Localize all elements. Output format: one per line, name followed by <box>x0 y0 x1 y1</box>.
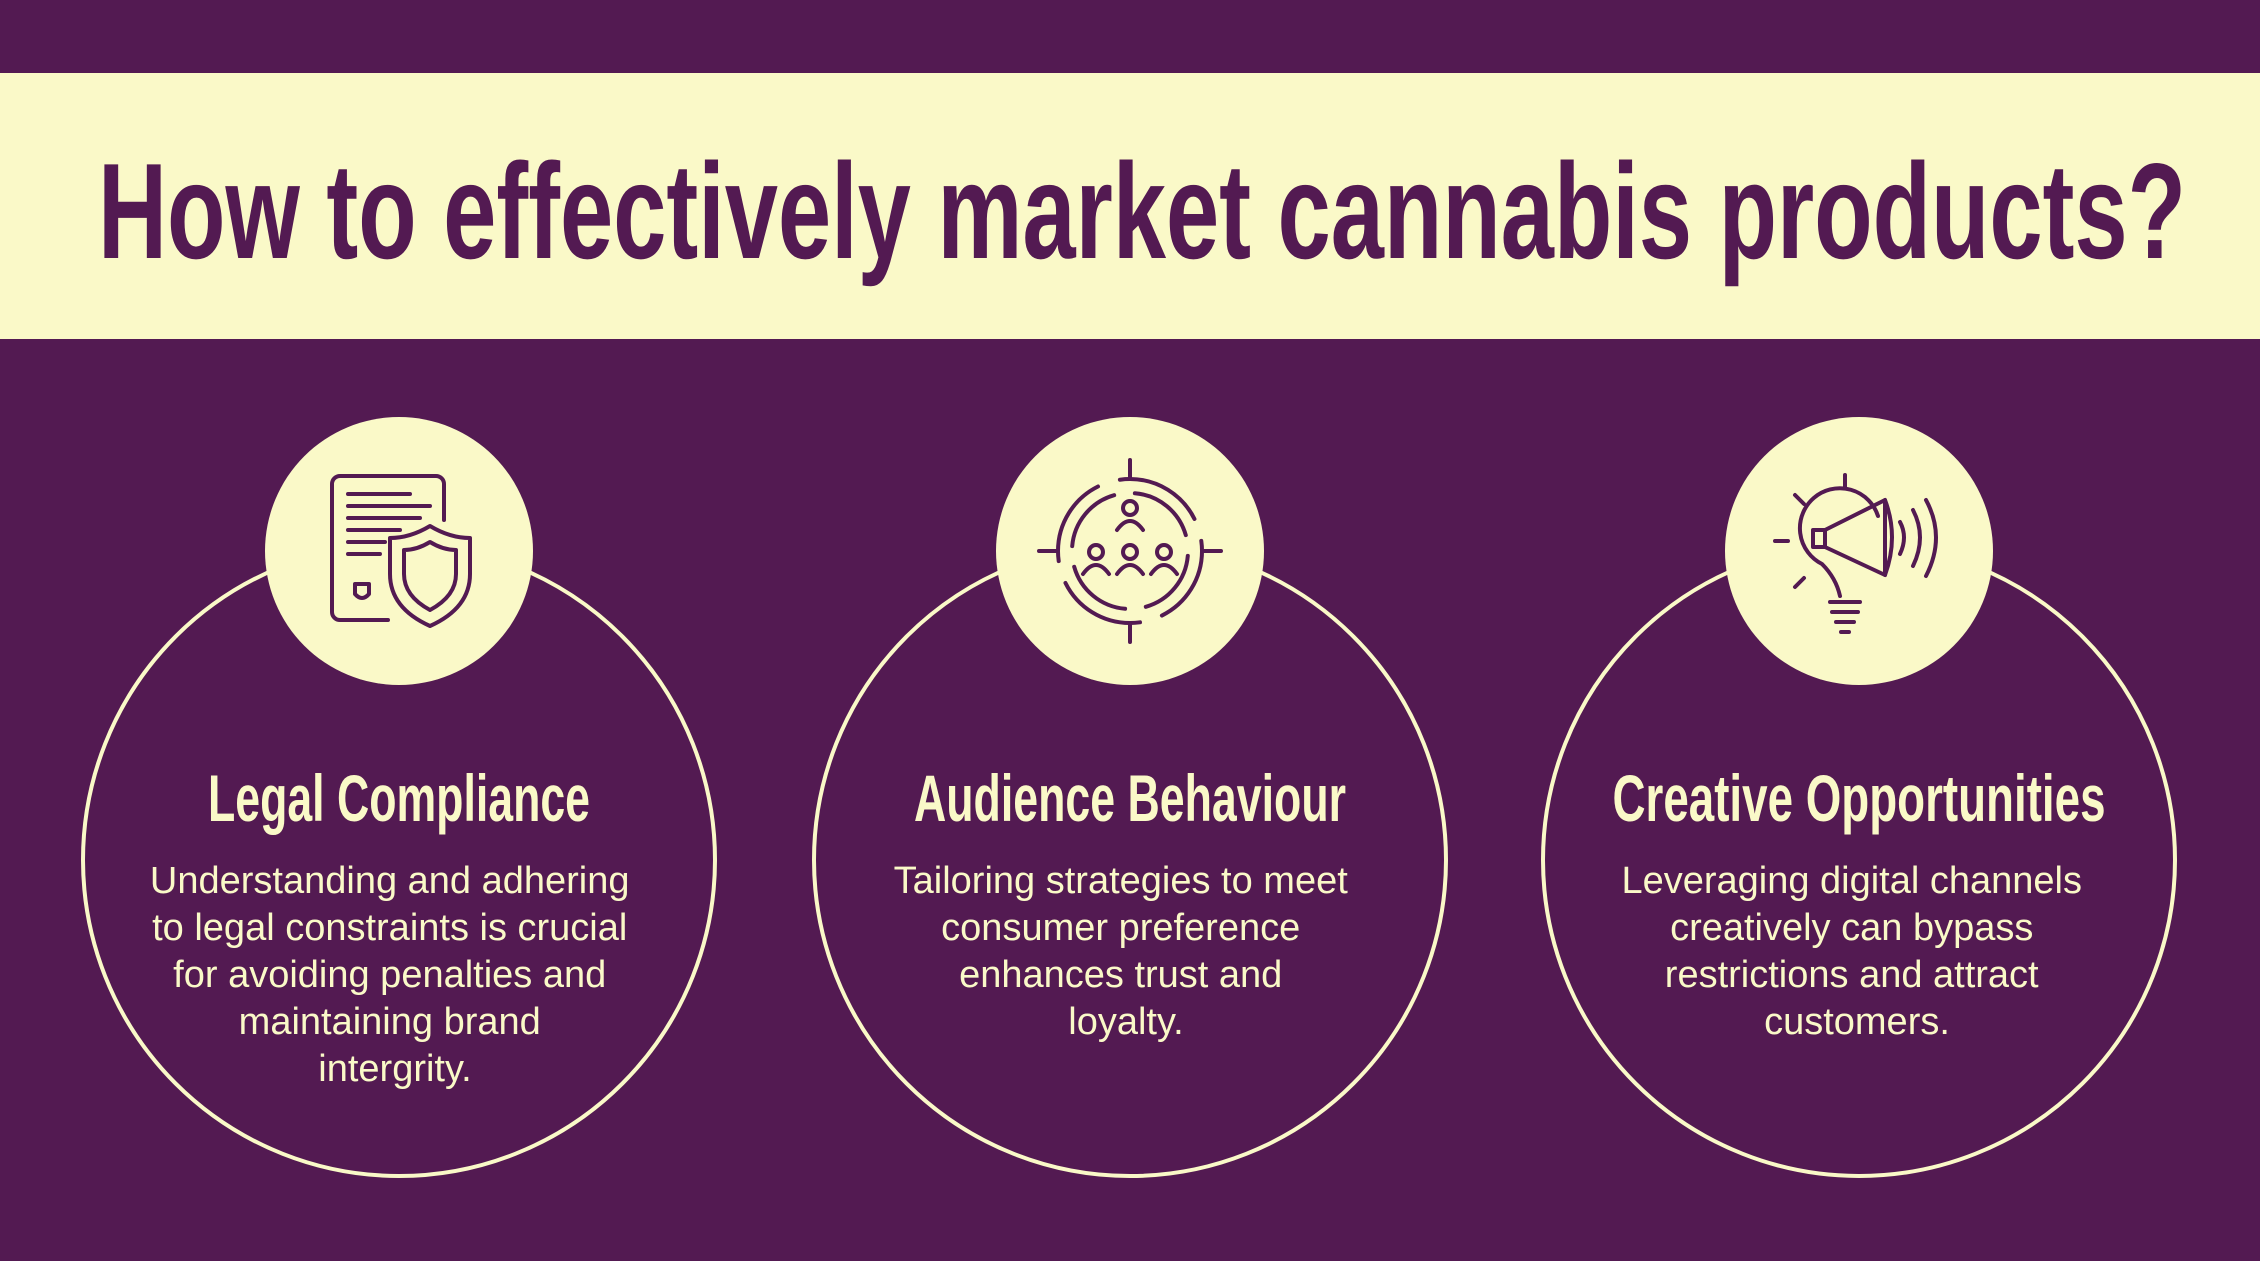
heading: Legal Compliance <box>208 761 590 835</box>
body text: for avoiding penalties and <box>173 954 606 996</box>
body text: Understanding and adhering <box>150 860 630 902</box>
body text: customers. <box>1764 1001 1950 1043</box>
body text: creatively can bypass <box>1670 907 2033 949</box>
body text: consumer preference <box>941 907 1300 949</box>
body text: maintaining brand <box>239 1001 541 1043</box>
panel: creative opportunities <box>1543 417 2175 1176</box>
body text: Tailoring strategies to meet <box>894 860 1348 902</box>
panel: legal compliance <box>83 417 715 1176</box>
title banner <box>0 73 2260 339</box>
icon: lightbulb megaphone <box>1775 475 1936 632</box>
body text: restrictions and attract <box>1665 954 2039 996</box>
icon: target audience <box>1039 460 1221 642</box>
body text: Leveraging digital channels <box>1621 860 2082 902</box>
body text: to legal constraints is crucial <box>152 907 627 949</box>
panel: audience behaviour <box>814 417 1446 1176</box>
icon: document with shield <box>332 476 470 626</box>
body text: enhances trust and <box>959 954 1282 996</box>
body text: intergrity. <box>318 1048 472 1090</box>
heading: Audience Behaviour <box>914 761 1346 835</box>
body text: loyalty. <box>1068 1001 1184 1043</box>
